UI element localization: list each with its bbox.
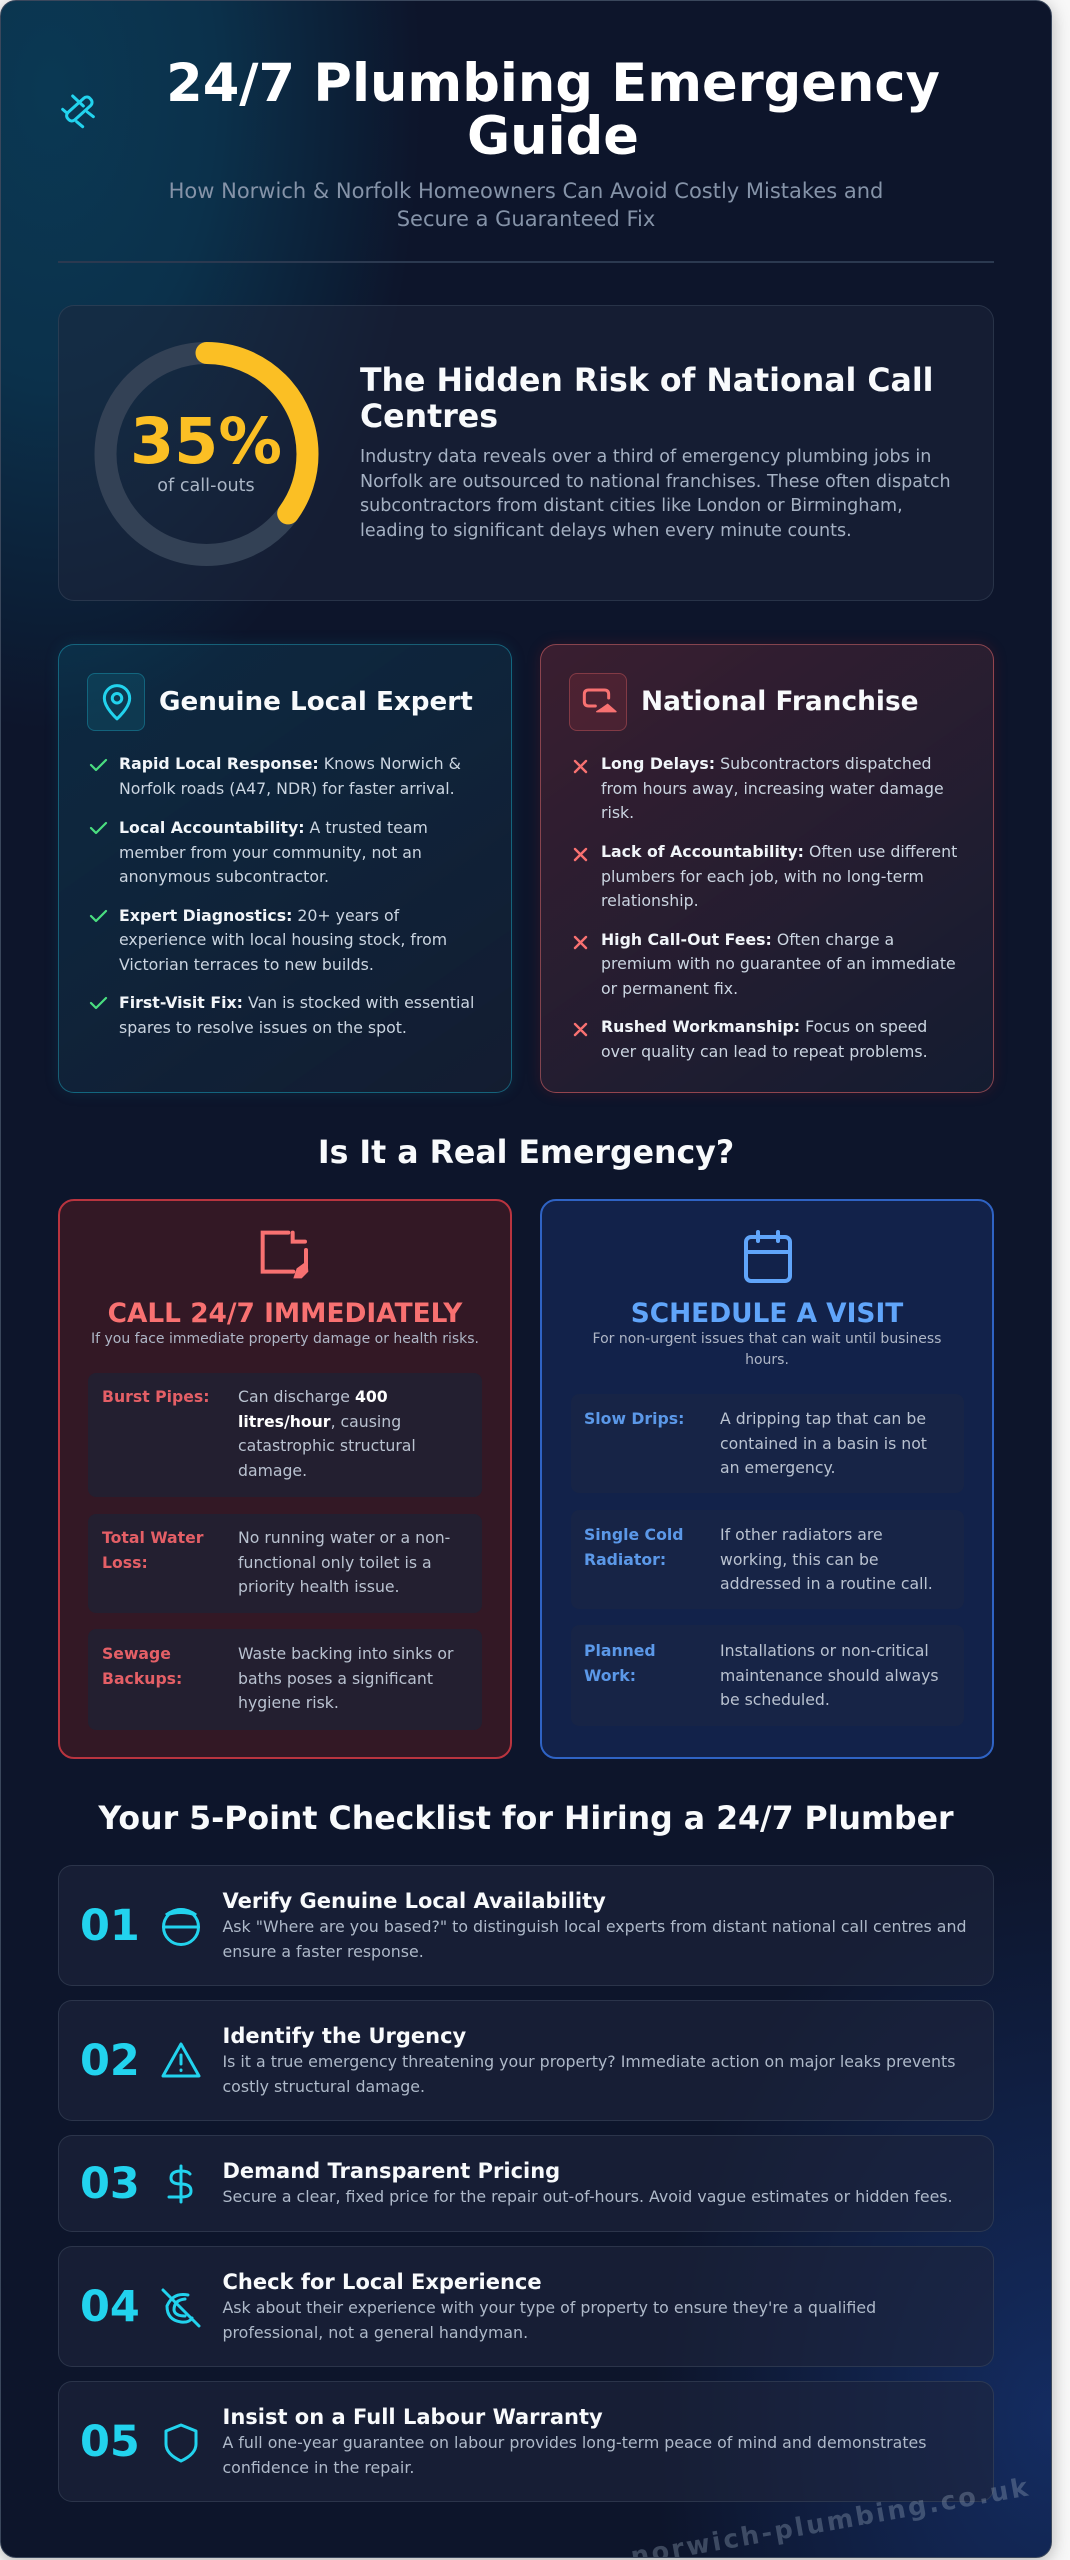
item text: Expert Diagnostics: 20+ years of [119,906,399,924]
item text [119,993,474,1037]
icon: eye off [161,2288,200,2328]
number: 05 [80,2417,140,2467]
icon: warning [162,2042,201,2078]
icon: shield [164,2424,198,2462]
stat heading: The Hidden Risk of National Call [360,363,934,399]
step title: Identify the Urgency [222,2024,466,2048]
description: contained in a basin is not [720,1434,927,1453]
label: Sewage [102,1644,171,1663]
step text [222,1917,966,1961]
step text [222,2052,955,2096]
stat text: Industry data reveals over a third of emergency plumbing jobs in [360,447,931,467]
description: addressed in a routine call. [720,1574,933,1593]
step text [222,2433,926,2477]
item text: relationship. [601,891,699,910]
item text: Long Delays: Subcontractors dispatched [601,754,932,773]
stat text [360,447,951,541]
label [584,1525,683,1569]
item text: from hours away, increasing water damage [601,779,944,798]
title: Guide [467,106,639,167]
step text: ensure a faster response. [222,1942,424,1961]
label: Slow Drips: [584,1409,684,1428]
icon: crosses [574,760,588,1036]
item text: plumbers for each job, with no long-term [601,867,924,886]
heading: checklist: Your 5-Point Checklist for Hiring a 24/7 Plumber [98,1801,954,1837]
item text: over quality can lead to repeat problems. [601,1042,928,1061]
panel subheading: For non-urgent issues that can wait until business [593,1331,941,1347]
item text: premium with no guarantee of an immediate [601,954,956,973]
step title: Verify Genuine Local Availability [222,1889,606,1913]
label: Loss: [102,1553,148,1572]
title [166,53,940,167]
description [720,1525,933,1593]
step text: Secure a clear, fixed price for the repair out-of-hours. Avoid vague estimates or hidden fees. [222,2187,953,2206]
step text: confidence in the repair. [222,2458,414,2477]
title: 24/7 Plumbing Emergency [166,53,940,114]
panel subheading: hours. [745,1352,789,1368]
label: Single Cold [584,1525,683,1544]
item text: risk. [601,803,634,822]
description: catastrophic structural [238,1436,416,1455]
description: an emergency. [720,1458,836,1477]
stat text: subcontractors from distant cities like London or Birmingham, [360,496,903,516]
row: single cold radiator [571,1510,964,1609]
step text: Ask "Where are you based?" to distinguish local experts from distant national call centres and [222,1917,966,1936]
icon: dollar [168,2164,192,2204]
card: step 2 [58,2000,994,2121]
list: benefits [90,754,474,1037]
description: priority health issue. [238,1577,400,1596]
step title: Demand Transparent Pricing [222,2159,560,2183]
row: burst pipes [88,1373,482,1497]
number: 02 [80,2036,140,2086]
heading: real emergency: Is It a Real Emergency? [318,1135,734,1171]
card: step 5 [58,2381,994,2502]
stat text: leading to significant delays when every minute counts. [360,521,852,541]
icon: calendar [744,1230,792,1283]
item text: Rapid Local Response: Knows Norwich & [119,754,461,773]
label: Planned [584,1641,656,1660]
number: 01 [80,1901,140,1951]
icon: wrench [61,94,95,128]
item text [601,930,956,998]
item text: First-Visit Fix: Van is stocked with essential [119,993,474,1012]
card: step 3 [58,2135,994,2232]
panel subheading [593,1331,941,1368]
icon: checks [90,758,108,1010]
row: total water loss [88,1514,482,1613]
step text [222,2298,876,2342]
step title: Check for Local Experience [222,2270,542,2294]
label: Radiator: [584,1550,666,1569]
label: Work: [584,1666,636,1685]
icon: map pin [87,673,145,731]
description: If other radiators are [720,1525,883,1544]
item text [601,1017,928,1061]
description [238,1644,454,1712]
stat heading: Centres [360,398,498,434]
item text [601,842,957,910]
description [238,1528,450,1596]
subtitle: How Norwich & Norfolk Homeowners Can Avoid Costly Mistakes and [169,179,883,203]
icon: call centre [569,673,627,731]
item text [119,818,428,886]
row: slow drips [571,1394,964,1493]
item text: or permanent fix. [601,979,738,998]
description [720,1409,927,1477]
item text: Local Accountability: A trusted team [119,818,428,837]
description [238,1387,416,1480]
label: Total Water [102,1528,204,1547]
donut chart: 35% [94,342,318,566]
panel: call immediately [58,1199,512,1759]
row: sewage backups [88,1629,482,1730]
stat value: 35% [130,404,282,478]
panel heading: SCHEDULE A VISIT [631,1298,903,1329]
label [102,1644,182,1688]
description: damage. [238,1461,307,1480]
label [584,1641,656,1685]
subtitle: Secure a Guaranteed Fix [397,207,655,231]
icon: burst pipe [260,1230,308,1278]
item text [119,754,461,798]
panel: schedule a visit [540,1199,994,1759]
description: functional only toilet is a [238,1553,432,1572]
heading: National Franchise [641,686,919,717]
item text: Lack of Accountability: Often use different [601,842,957,861]
panel subheading: If you face immediate property damage or health risks. [91,1331,479,1347]
number: 04 [80,2282,140,2332]
stat caption: of call-outs [157,476,255,496]
description: litres/hour, causing [238,1412,401,1431]
step text: Is it a true emergency threatening your property? Immediate action on major leaks prevents [222,2052,955,2071]
number: 03 [80,2159,140,2209]
item text: experience with local housing stock, from [119,930,447,949]
step title: Insist on a Full Labour Warranty [222,2405,603,2429]
description: hygiene risk. [238,1693,339,1712]
description: maintenance should always [720,1666,939,1685]
label: Backups: [102,1669,182,1688]
label: Burst Pipes: [102,1387,210,1406]
list: drawbacks [574,754,957,1061]
stat heading [360,363,934,434]
item text [601,754,944,822]
item text: Norfolk roads (A47, NDR) for faster arrival. [119,779,455,798]
card: step 1 [58,1865,994,1986]
description: Waste backing into sinks or [238,1644,453,1663]
description: No running water or a non- [238,1528,450,1547]
panel heading: CALL 24/7 IMMEDIATELY [108,1298,462,1329]
item text: member from your community, not an [119,843,422,862]
description: working, this can be [720,1550,879,1569]
item text: Rushed Workmanship: Focus on speed [601,1017,927,1036]
item text: spares to resolve issues on the spot. [119,1018,407,1037]
label [102,1528,204,1572]
description: A dripping tap that can be [720,1409,926,1428]
stat text: Norfolk are outsourced to national franchises. These often dispatch [360,472,951,492]
icon: globe [162,1908,200,1946]
card: step 4 [58,2246,994,2367]
item text: anonymous subcontractor. [119,867,329,886]
description: be scheduled. [720,1690,830,1709]
heading: Genuine Local Expert [159,687,473,717]
step text: costly structural damage. [222,2077,425,2096]
item text: High Call-Out Fees: Often charge a [601,930,894,948]
panel: national franchise [540,644,994,1093]
item text [119,906,447,974]
description [720,1641,939,1709]
panel: hidden risk stat [58,305,994,601]
step text: Ask about their experience with your type of property to ensure they're a qualified [222,2298,876,2317]
description: Can discharge 400 [238,1387,388,1406]
step text: professional, not a general handyman. [222,2323,528,2342]
step text: A full one-year guarantee on labour provides long-term peace of mind and demonstrates [222,2433,926,2452]
panel: genuine local expert [58,644,512,1093]
description: Installations or non-critical [720,1641,929,1660]
row: planned work [571,1625,964,1726]
subtitle [169,179,883,231]
item text: Victorian terraces to new builds. [119,955,374,974]
description: baths poses a significant [238,1669,433,1688]
